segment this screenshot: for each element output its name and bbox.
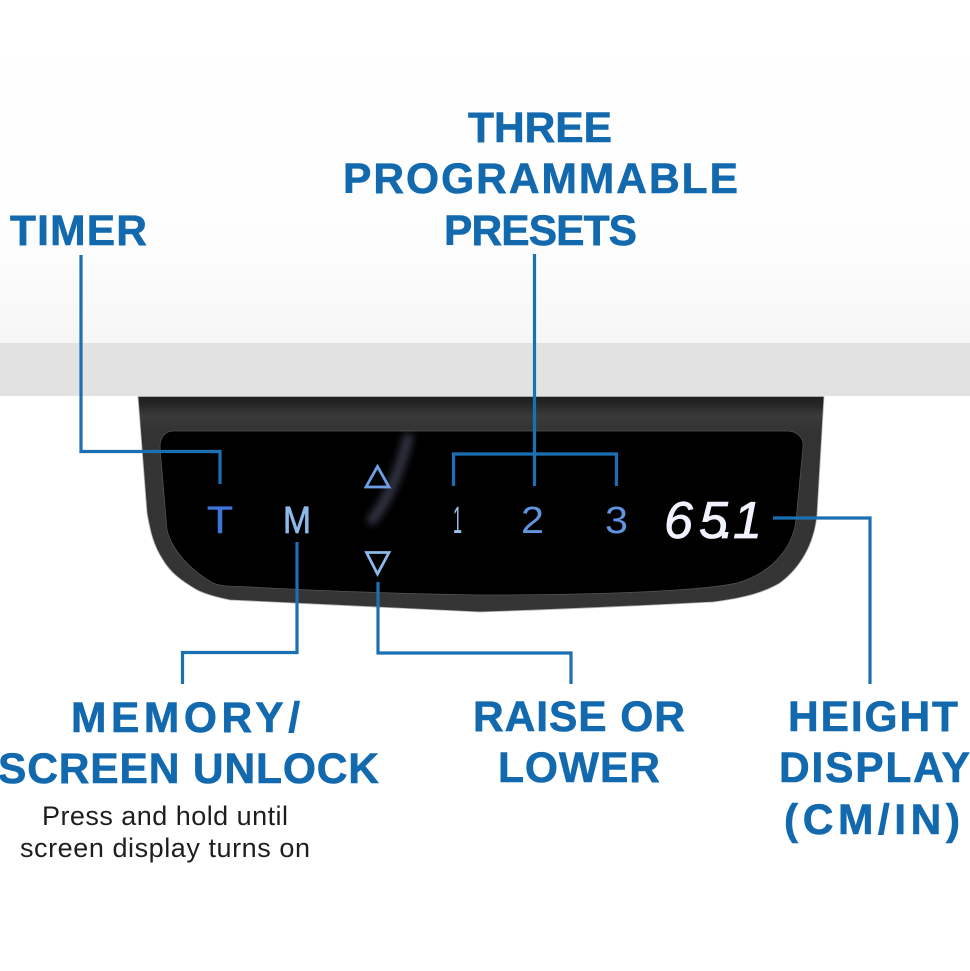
heading: three programmable presets <box>343 105 738 255</box>
heading: memory / screen unlock <box>0 695 379 793</box>
control panel <box>138 396 824 612</box>
heading: timer: TIMER <box>10 208 147 255</box>
panel shell <box>138 396 824 612</box>
heading: height display: (CM/IN) <box>784 797 960 844</box>
heading: height display <box>779 694 970 844</box>
heading: height display: DISPLAY <box>779 745 970 792</box>
heading: three programmable presets: PROGRAMMABLE <box>343 156 738 203</box>
line: timer <box>81 255 220 484</box>
memory note <box>20 801 310 863</box>
icon: down arrow <box>366 552 389 574</box>
heading: raise or lower: RAISE OR <box>473 694 685 741</box>
screen reflection <box>372 438 408 520</box>
heading: three programmable presets: PRESETS <box>444 208 637 255</box>
control panel: 1 <box>453 500 462 542</box>
line: height display <box>773 518 870 684</box>
key: memory: M <box>283 500 311 542</box>
heading: height display: HEIGHT <box>788 694 958 741</box>
heading: raise or lower <box>473 694 685 792</box>
key: preset 3: 3 <box>605 500 628 542</box>
heading: memory / screen unlock: SCREEN UNLOCK <box>0 746 379 793</box>
height readout: 65.1 <box>664 492 762 550</box>
icon: up arrow <box>366 466 389 487</box>
key: preset 2: 2 <box>521 500 544 542</box>
touch screen <box>160 431 803 595</box>
memory note: screen display turns on <box>20 833 310 863</box>
line: memory <box>182 542 297 684</box>
key: timer: T <box>207 500 233 542</box>
line: raise or lower <box>378 582 571 684</box>
heading: three programmable presets: THREE <box>468 105 612 152</box>
heading: raise or lower: LOWER <box>498 745 660 792</box>
leader lines <box>81 254 870 684</box>
desk surface <box>0 0 970 396</box>
memory note: Press and hold until <box>42 801 288 831</box>
line: presets <box>454 254 616 486</box>
heading: memory / screen unlock: MEMORY/ <box>71 695 300 742</box>
